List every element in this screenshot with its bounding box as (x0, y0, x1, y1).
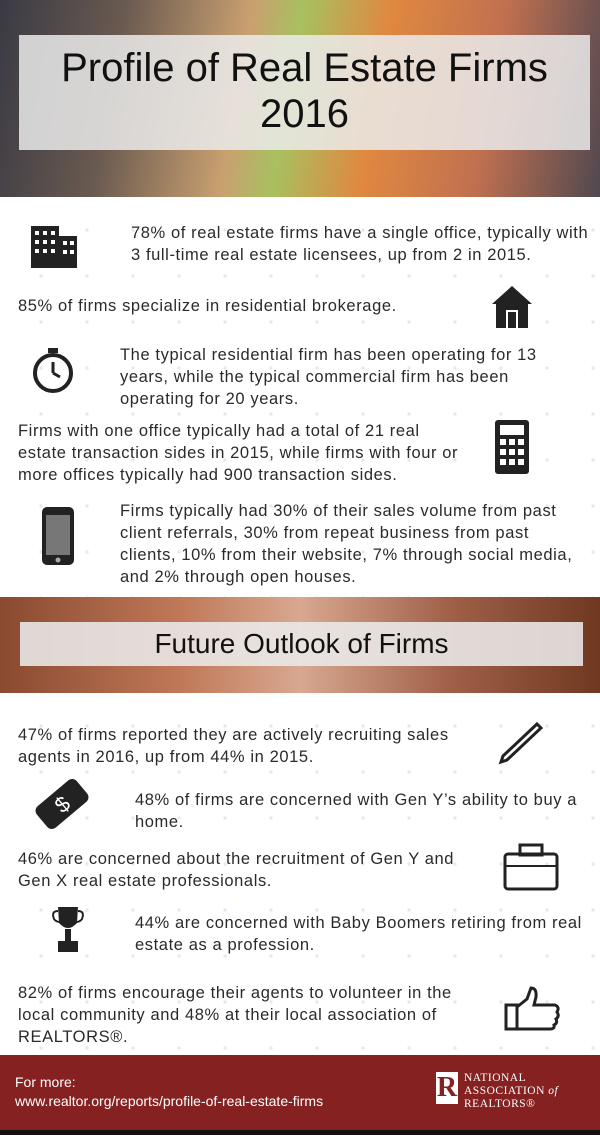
text: residential: 85% of firms specialize in residential brokerage. (18, 297, 397, 315)
text: recruiting: agents in 2016, up from 44% in 2015. (18, 748, 314, 766)
footer (0, 1055, 600, 1130)
second banner (0, 597, 600, 693)
header banner (0, 0, 600, 197)
text: transaction sides: Firms with one office typically had a total of 21 real (18, 422, 420, 440)
footer text (15, 1074, 323, 1109)
text: sales volume (120, 502, 572, 586)
icon: price tag: $ (50, 791, 75, 818)
text: single office: 78% of real estate firms have a single office, typically with (131, 224, 588, 242)
text: sales volume: Firms typically had 30% of their sales volume from past (120, 502, 556, 520)
footer text: www.realtor.org/reports/profile-of-real-estate-firms (15, 1093, 323, 1109)
section heading: Future Outlook of Firms (154, 628, 449, 659)
text: recruiting (18, 726, 449, 766)
text: gen y buy: 48% of firms are concerned with Gen Y’s ability to buy a (135, 791, 577, 809)
footer text: For more: (15, 1074, 76, 1090)
text: volunteer (18, 984, 452, 1046)
text: gen y buy (135, 791, 577, 831)
text: volunteer: REALTORS®. (18, 1028, 128, 1046)
icon: stopwatch (33, 348, 73, 393)
text: sales volume: clients, 10% from their website, 7% through social media, (120, 546, 572, 564)
text: baby boomers: estate as a profession. (135, 936, 315, 954)
text: recruitment gen y x: Gen X real estate professionals. (18, 872, 272, 890)
icon: trophy (52, 907, 84, 952)
logo: REALTORS® (464, 1098, 535, 1110)
text: baby boomers: 44% are concerned with Baby Boomers retiring from real (135, 914, 582, 932)
text: transaction sides (18, 422, 458, 484)
text: volunteer: local community and 48% at their local association of (18, 1006, 437, 1024)
text: single office (131, 224, 588, 264)
text: recruitment gen y x (18, 850, 454, 890)
logo (436, 1072, 559, 1110)
text: baby boomers (135, 914, 582, 954)
icon: house (492, 286, 532, 328)
icon: calculator (495, 420, 529, 474)
text: single office: 3 full-time real estate licensees, up from 2 in 2015. (131, 246, 532, 264)
text: operating years: years, while the typical commercial firm has been (120, 368, 509, 386)
section heading (20, 622, 583, 666)
text: sales volume: client referrals, 30% from repeat business from past (120, 524, 529, 542)
icon: building (31, 226, 77, 268)
text: volunteer: 82% of firms encourage their agents to volunteer in the (18, 984, 452, 1002)
text: recruitment gen y x: 46% are concerned about the recruitment of Gen Y and (18, 850, 454, 868)
text: transaction sides: estate transaction sides in 2015, while firms with four or (18, 444, 458, 462)
logo: R (437, 1072, 457, 1103)
title box: Profile of Real Estate Firms (61, 46, 548, 90)
text: transaction sides: more offices typically had 900 transaction sides. (18, 466, 397, 484)
icon: briefcase (504, 844, 558, 890)
text: operating years: The typical residential firm has been operating for 13 (120, 346, 537, 364)
text: gen y buy: home. (135, 813, 184, 831)
logo: NATIONAL (464, 1072, 526, 1084)
icon: thumbs up (504, 986, 560, 1030)
text: recruiting: 47% of firms reported they are actively recruiting sales (18, 726, 449, 744)
text: sales volume: and 2% through open houses. (120, 568, 356, 586)
text: operating years (120, 346, 537, 408)
title box: 2016 (260, 92, 349, 136)
icon: price tag (36, 779, 88, 829)
icon: phone (42, 507, 74, 565)
text: operating years: operating for 20 years. (120, 390, 299, 408)
icon: pen (498, 722, 543, 764)
logo: ASSOCIATION of (464, 1085, 558, 1097)
title box (19, 35, 590, 150)
